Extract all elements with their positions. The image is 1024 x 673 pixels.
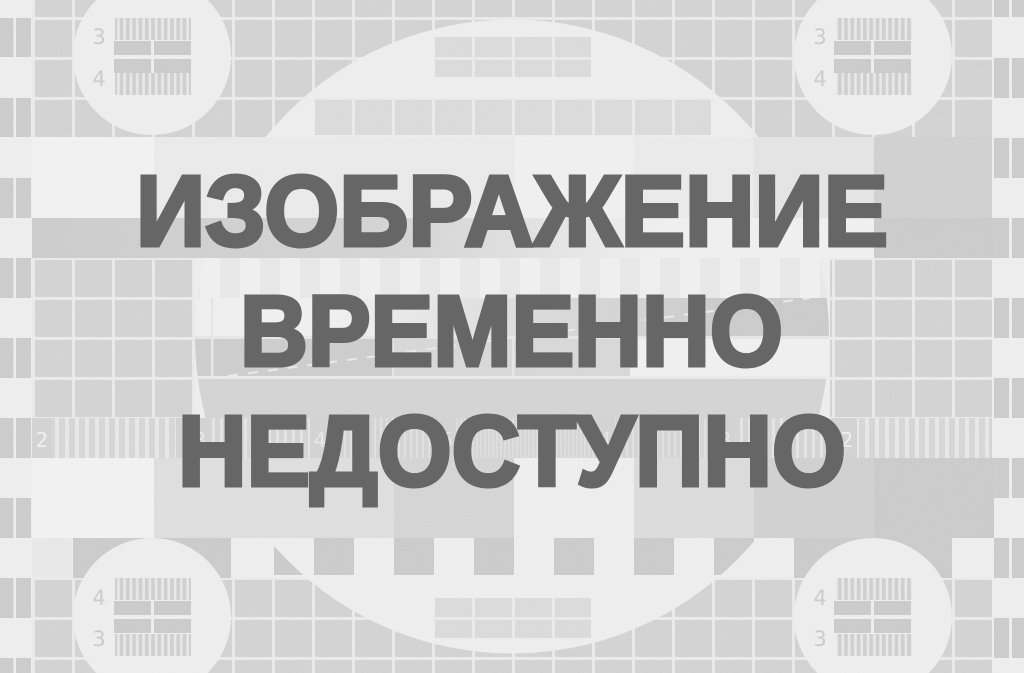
frequency stripe row: 2 [36, 428, 48, 452]
frequency stripe row: 2 [841, 428, 853, 452]
corner circle: top right: 3 [813, 25, 827, 49]
lower band row [32, 458, 994, 538]
corner circle: bottom right: 4 [813, 586, 827, 610]
corner circle: bottom left [73, 538, 231, 673]
corner circle: top right [794, 0, 952, 135]
grid: top [32, 0, 992, 137]
circle cells: top row [314, 98, 711, 135]
corner circle: top left: 3 [92, 25, 106, 49]
corner circle: bottom left: 4 [92, 586, 106, 610]
line 3: НЕДОСТУПНО [178, 396, 846, 508]
frequency stripe row: 4 [314, 428, 326, 452]
corner circle: bottom right [794, 538, 952, 673]
gray gradient band [32, 218, 994, 258]
frequency stripe row: 5 [441, 428, 453, 452]
left edge bars [0, 0, 31, 673]
grid: left side [32, 258, 195, 418]
circle cells: bottom squares [314, 538, 754, 575]
corner circle: bottom left: 3 [92, 627, 106, 651]
right edge bars [994, 0, 1024, 673]
big central circle [266, 20, 758, 654]
circle cells: bottom block [434, 598, 591, 638]
line 1: ИЗОБРАЖЕНИЕ [136, 156, 888, 268]
line 2: ВРЕМЕННО [240, 276, 783, 388]
frequency stripe row: 4 [599, 428, 611, 452]
centre panels clipped to circle [195, 298, 829, 418]
frequency stripe row: 3 [194, 428, 206, 452]
light band row [32, 137, 992, 218]
corner circle: top left: 4 [92, 67, 106, 91]
corner circle: top left [73, 0, 231, 135]
grid: right side [830, 258, 992, 418]
corner circle: bottom right: 3 [813, 627, 827, 651]
circle cells: top block [434, 37, 591, 77]
frequency stripe row: 3 [719, 428, 731, 452]
corner circle: top right: 4 [813, 67, 827, 91]
grid: bottom [32, 538, 992, 673]
headline [136, 156, 888, 508]
frequency stripe row [32, 418, 992, 458]
